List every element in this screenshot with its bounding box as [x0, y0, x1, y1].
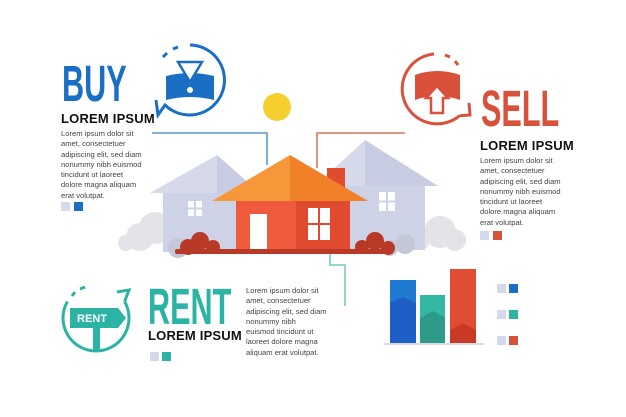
buy heading: BUY: [62, 55, 127, 112]
icon: sell: [402, 54, 470, 124]
sell text: Lorem ipsum dolor sit: [480, 156, 553, 165]
rent text: amet, consectetuer: [246, 296, 311, 305]
icon: rent: RENT: [77, 313, 107, 325]
left gray house: [150, 155, 260, 252]
buy text: tincidunt ut laoreet: [61, 170, 123, 179]
buy squares: [61, 202, 83, 211]
buy text: nonummy nibh euismod: [61, 160, 142, 169]
connector lines: [152, 133, 405, 306]
rent text: laoreet dolore magna: [246, 337, 318, 346]
buy text: amet, consectetuer: [61, 139, 126, 148]
sun: [263, 93, 291, 121]
rent subtitle: LOREM IPSUM: [148, 328, 242, 343]
buy subtitle: LOREM IPSUM: [61, 111, 155, 126]
buy text: dolore magna aliquam: [61, 180, 136, 189]
buy text: [61, 129, 142, 200]
icon: rent: [63, 287, 129, 351]
rent text: aliquam erat volutpat.: [246, 348, 319, 357]
buy text: erat volutpat.: [61, 191, 105, 200]
sell text: tincidunt ut laoreet: [480, 197, 542, 206]
bar chart: [384, 269, 484, 345]
rent text: [246, 286, 327, 357]
rent text: euismod tincidunt ut: [246, 327, 314, 336]
icon: buy: [156, 45, 224, 115]
rent squares: [150, 352, 171, 361]
sell squares: [480, 231, 502, 240]
sell text: nonummy nibh euismod: [480, 187, 561, 196]
sell text: amet, consectetuer: [480, 166, 545, 175]
rent heading: RENT: [148, 278, 231, 335]
rent text: nonummy nibh: [246, 317, 296, 326]
sell heading: SELL: [481, 80, 559, 137]
buy text: Lorem ipsum dolor sit: [61, 129, 134, 138]
main orange house: [212, 155, 368, 253]
sell text: dolore magna aliquam: [480, 207, 555, 216]
rent text: Lorem ipsum dolor sit: [246, 286, 319, 295]
sell text: erat volutpat.: [480, 218, 524, 227]
sell text: [480, 156, 561, 227]
sell subtitle: LOREM IPSUM: [480, 138, 574, 153]
sell text: adipiscing elit, sed diam: [480, 177, 561, 186]
bushes: [175, 232, 395, 255]
chart legend: [497, 284, 518, 345]
right gray house: [315, 140, 438, 250]
buy text: adipiscing elit, sed diam: [61, 150, 142, 159]
clouds: [118, 212, 466, 251]
rent text: adipiscing elit, sed diam: [246, 307, 327, 316]
